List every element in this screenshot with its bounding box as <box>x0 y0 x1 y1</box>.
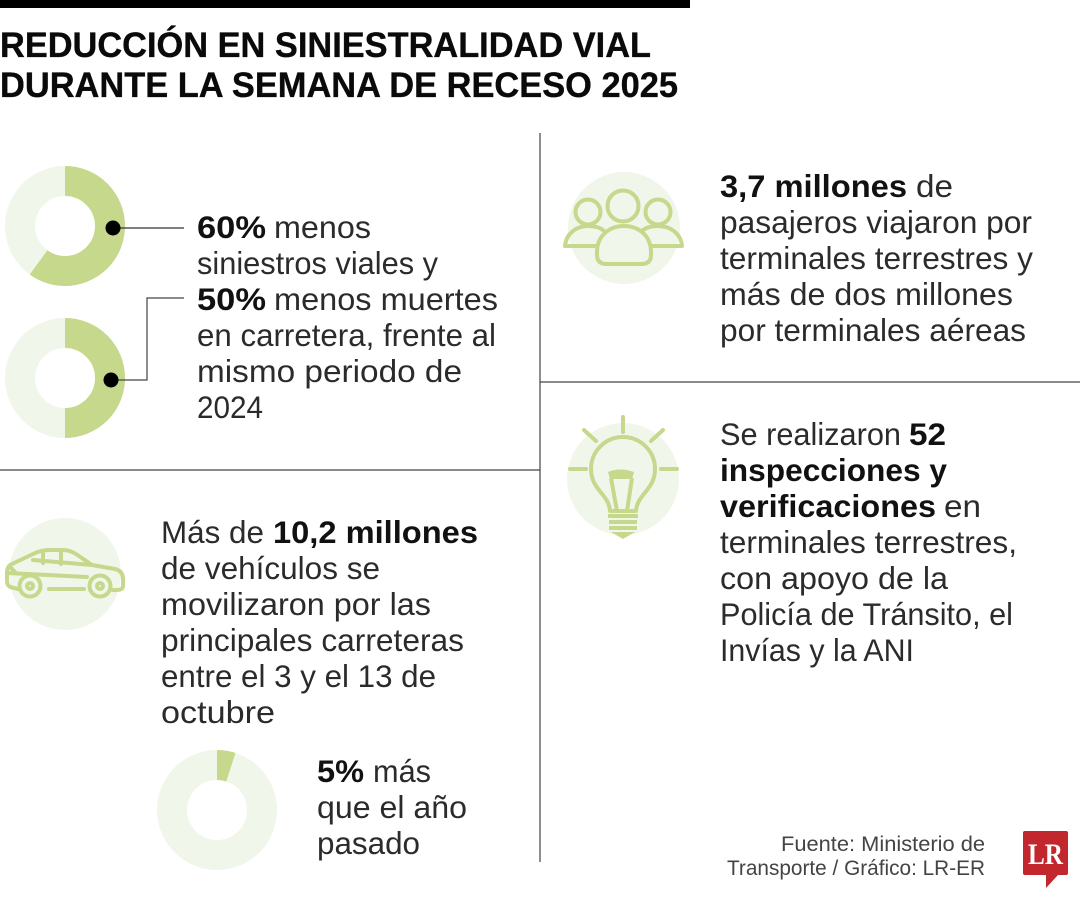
text block: accident reduction: en carretera, frente al <box>197 317 496 353</box>
connector: 60% to text <box>106 220 184 236</box>
text block: passengers: 3,7 millones <box>720 168 907 204</box>
text block: accident reduction: 2024 <box>197 389 263 425</box>
donut chart: 5% <box>172 765 262 855</box>
text block: passengers: más de dos millones <box>720 276 1013 312</box>
text block: inspections: en <box>944 488 981 524</box>
donut chart: 50% <box>20 333 110 423</box>
text block: vehicles: principales carreteras <box>161 622 464 658</box>
text block: accident reduction: mismo periodo de <box>197 353 462 389</box>
text block: 5% more: 5% <box>317 753 364 789</box>
text block: accident reduction: 60% <box>197 209 266 245</box>
source credit: Fuente: Ministerio de <box>781 833 985 856</box>
text block: vehicles: Más de <box>161 514 264 550</box>
text block: 5% more: más <box>373 753 431 789</box>
text block: accident reduction: 50% <box>197 281 266 317</box>
source credit <box>727 833 985 880</box>
donut chart: 60% <box>20 181 110 271</box>
logo: LR: LR <box>1028 838 1063 871</box>
title: DURANTE LA SEMANA DE RECESO 2025 <box>0 65 678 105</box>
text block: vehicles: movilizaron por las <box>161 586 431 622</box>
text block: inspections: terminales terrestres, <box>720 524 1017 560</box>
text block: inspections: 52 <box>909 416 946 452</box>
text block: vehicles: de vehículos se <box>161 550 380 586</box>
text block: vehicles: octubre <box>161 694 275 730</box>
text block: 5% more: pasado <box>317 825 420 861</box>
text block: vehicles: entre el 3 y el 13 de <box>161 658 436 694</box>
logo: LR <box>1023 831 1068 888</box>
title <box>0 25 678 105</box>
text block: passengers <box>720 168 1033 348</box>
text block: accident reduction <box>197 209 498 425</box>
icon: car <box>7 518 123 630</box>
text block: passengers: terminales terrestres y <box>720 240 1033 276</box>
text block: inspections: Policía de Tránsito, el <box>720 596 1013 632</box>
text block: passengers: por terminales aéreas <box>720 312 1026 348</box>
text block: accident reduction: menos muertes <box>274 281 498 317</box>
text block: 5% more <box>317 753 467 861</box>
title: REDUCCIÓN EN SINIESTRALIDAD VIAL <box>0 25 651 65</box>
text block: inspections: con apoyo de la <box>720 560 948 596</box>
text block: passengers: pasajeros viajaron por <box>720 204 1032 240</box>
text block: inspections: verificaciones <box>720 488 936 524</box>
text block: passengers: de <box>916 168 953 204</box>
connector: 50% to text <box>104 298 184 388</box>
text block: accident reduction: menos <box>274 209 371 245</box>
text block: vehicles: 10,2 millones <box>273 514 478 550</box>
text block: inspections: Se realizaron <box>720 416 901 452</box>
text block: inspections <box>720 416 1017 668</box>
text block: 5% more: que el año <box>317 789 467 825</box>
text block: inspections: Invías y la ANI <box>720 632 914 668</box>
text block: inspections: inspecciones y <box>720 452 947 488</box>
icon: light bulb <box>567 417 679 539</box>
icon: people <box>565 172 682 284</box>
text block: vehicles <box>161 514 478 730</box>
text block: accident reduction: siniestros viales y <box>197 245 438 281</box>
source credit: Transporte / Gráfico: LR-ER <box>727 857 985 880</box>
